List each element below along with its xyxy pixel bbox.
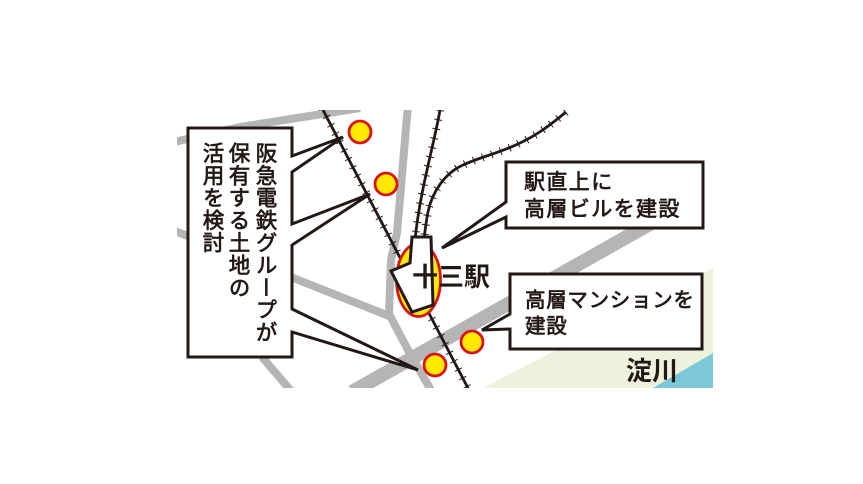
callout: station high-rise	[442, 162, 703, 248]
river	[653, 353, 713, 388]
station building	[391, 237, 433, 312]
callout text line 2: 高層ビルを建設	[524, 198, 681, 221]
site marker: upper left	[349, 121, 371, 143]
roads	[170, 105, 655, 392]
station name: 十三駅	[412, 262, 490, 292]
callout text column 2: 保有する土地の	[226, 142, 250, 299]
callout: high-rise condominium	[482, 274, 702, 349]
callout: Hankyu group land	[188, 128, 418, 370]
site marker: lower right	[461, 331, 483, 353]
callout text column 1: 阪急電鉄グループが	[253, 142, 277, 344]
callout text column 3: 活用を検討	[200, 142, 224, 254]
railway: main line	[322, 108, 470, 392]
callout text line 2: 建設	[525, 315, 567, 338]
map area	[170, 105, 713, 392]
site marker: lower	[424, 354, 446, 376]
railway: north line	[415, 110, 440, 240]
callout text line 1: 駅直上に	[524, 171, 614, 194]
riverbank	[483, 268, 713, 388]
station site highlight	[396, 244, 440, 316]
railway: curved branch line	[424, 112, 566, 240]
callout text line 1: 高層マンションを	[525, 289, 695, 312]
river label: 淀川	[626, 356, 678, 386]
site marker: middle left	[375, 173, 397, 195]
